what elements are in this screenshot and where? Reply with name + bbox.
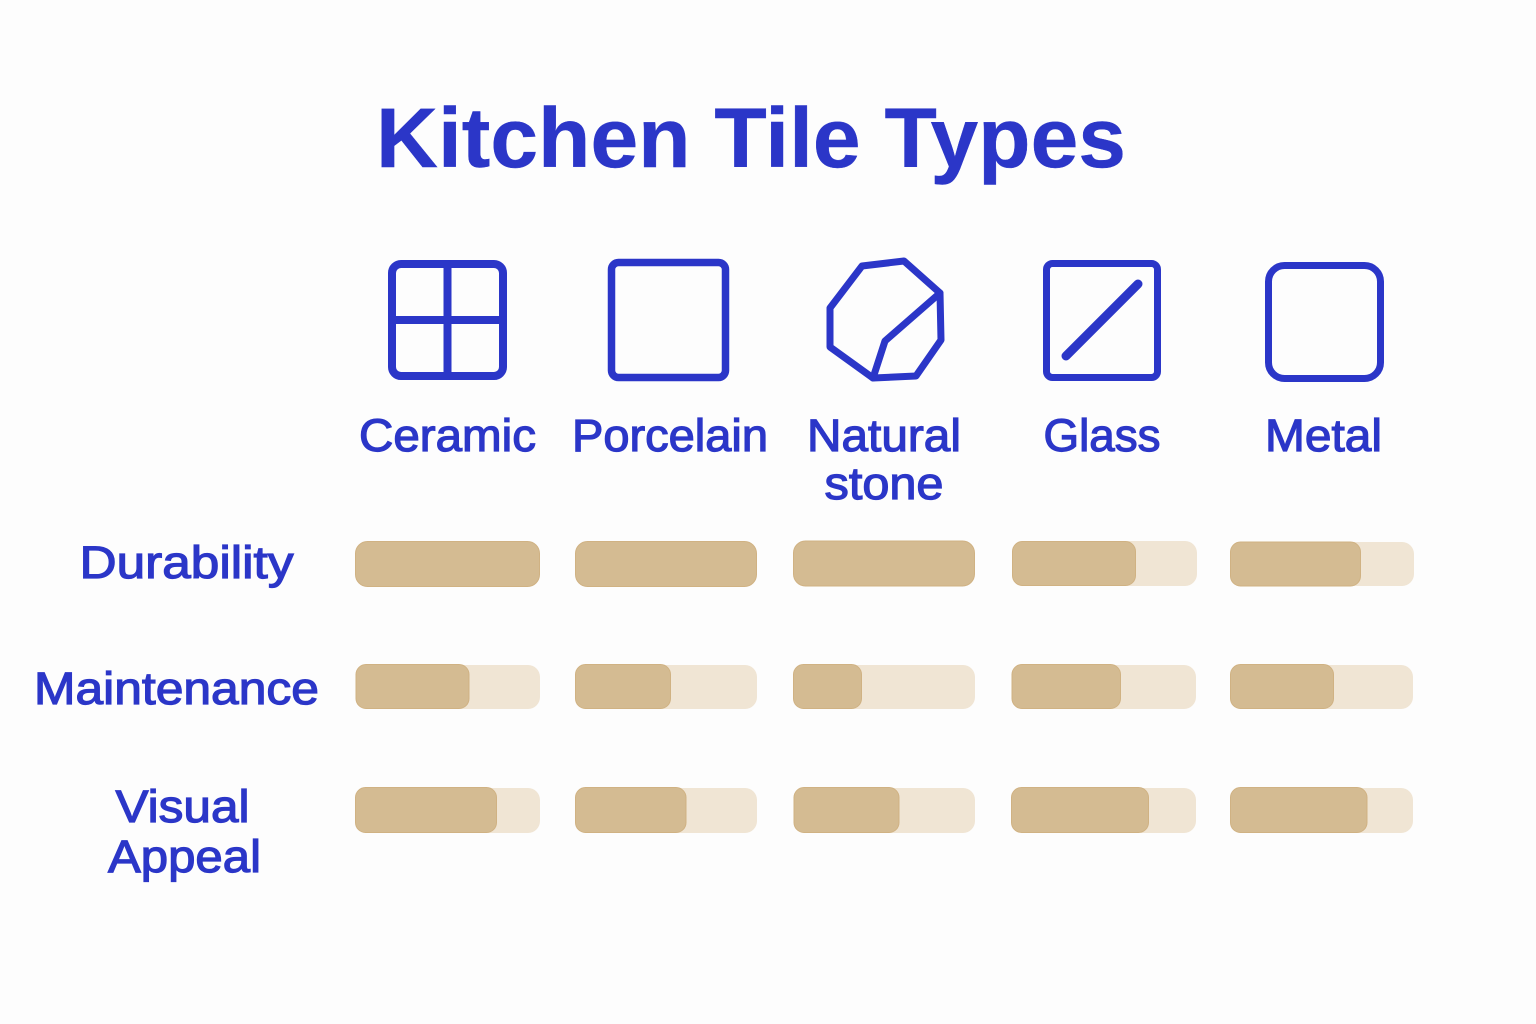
row: durability <box>80 537 1414 588</box>
bar: ceramic durability <box>356 542 540 586</box>
row label: visual appeal: Visual <box>116 781 250 832</box>
bar: porcelain visual appeal <box>575 788 757 833</box>
title: Kitchen Tile Types <box>376 91 1126 185</box>
row label: durability: Durability <box>80 537 294 588</box>
bar: glass maintenance <box>1012 664 1196 709</box>
icon: porcelain square tile <box>612 262 726 378</box>
icon: natural stone polygon <box>830 261 941 378</box>
label: natural stone <box>807 410 961 509</box>
bar: ceramic visual appeal <box>356 788 540 833</box>
label: ceramic: Ceramic <box>359 410 536 461</box>
bar: porcelain maintenance <box>575 664 757 709</box>
icon: ceramic four-part tile <box>392 264 503 376</box>
bar: natural stone maintenance <box>793 664 975 709</box>
bar: metal maintenance <box>1230 664 1413 709</box>
bar: metal durability <box>1230 542 1414 586</box>
bar: glass visual appeal <box>1012 788 1196 833</box>
bar: ceramic maintenance <box>356 664 540 709</box>
bar: porcelain durability <box>576 542 756 586</box>
icon: glass tile with diagonal <box>1046 264 1158 378</box>
row label: visual appeal: Appeal <box>108 831 261 882</box>
bar: natural stone visual appeal <box>794 788 975 833</box>
bar: natural stone durability <box>794 541 974 586</box>
label: natural stone: Natural <box>807 410 961 461</box>
bar: glass durability <box>1012 541 1197 586</box>
bar: metal visual appeal <box>1230 788 1413 833</box>
row: visual appeal <box>108 781 1413 882</box>
row label: visual appeal <box>108 781 261 882</box>
icons and tile type labels <box>359 261 1382 509</box>
label: metal: Metal <box>1265 410 1382 461</box>
icon: metal rounded tile <box>1268 266 1380 378</box>
label: porcelain: Porcelain <box>572 410 768 461</box>
label: natural stone: stone <box>824 458 944 509</box>
row: maintenance <box>34 663 1413 714</box>
label: glass: Glass <box>1044 410 1160 461</box>
row label: maintenance: Maintenance <box>34 663 319 714</box>
